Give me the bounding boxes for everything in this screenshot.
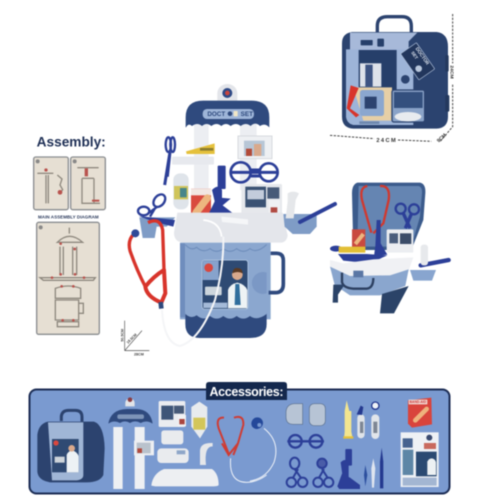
case poster: doctor (202, 260, 248, 309)
counter top (174, 213, 288, 243)
monitor (159, 401, 186, 427)
sticker: doctor set: SET (410, 50, 419, 60)
thermometer (357, 406, 365, 438)
monitor (387, 229, 413, 253)
open case with accessories (330, 183, 449, 313)
dimension axes: 28CM (134, 352, 144, 356)
counter (330, 257, 413, 278)
case handle (377, 17, 411, 33)
microscope (184, 166, 237, 227)
sticker: doctor set: DOCTOR (415, 46, 430, 66)
case base (330, 267, 409, 295)
tube (250, 428, 276, 481)
stethoscope (218, 417, 243, 455)
microscope (337, 449, 360, 489)
sticker: doctor set (401, 43, 435, 80)
dimension axes: 18.5CM (126, 333, 138, 345)
accessories items right (250, 398, 439, 489)
chest piece (252, 417, 263, 429)
frame (134, 441, 154, 455)
scissors (287, 458, 333, 487)
roof piece (108, 409, 153, 424)
band-aid box (408, 398, 432, 428)
packaged case with dimensions (330, 14, 455, 144)
open lid (352, 183, 425, 250)
band-aid box: BAND-AID (410, 400, 427, 404)
panel: accessories (30, 382, 450, 494)
panel: assembly (34, 135, 106, 334)
closed case (342, 32, 449, 129)
instruction sheet (401, 432, 439, 487)
monitor (241, 184, 282, 216)
label: depth 9CM: 9CM (436, 133, 448, 144)
top badge (217, 84, 237, 101)
icon: scissors upright (165, 137, 175, 185)
legs (333, 285, 409, 313)
scissors (396, 204, 419, 228)
dimension lines (330, 14, 453, 142)
accessories items left (37, 397, 267, 489)
chest piece (251, 418, 262, 429)
dimension axes (120, 321, 149, 356)
text: main assembly diagram: MAIN ASSEMBLY DIAGRAM (38, 215, 99, 220)
dimension axes: 50.5CM (120, 329, 124, 342)
syringe (343, 400, 353, 439)
right tray (410, 245, 449, 281)
tube (230, 458, 267, 482)
band-aid box (191, 189, 211, 215)
tools (364, 448, 383, 488)
heading: assembly: Assembly: (37, 135, 106, 150)
shelf with syringe (172, 143, 215, 165)
bottle (191, 402, 207, 438)
label: height 24CM: 24CM (449, 65, 455, 79)
red stethoscope (361, 186, 389, 233)
closed case (37, 410, 105, 482)
stethoscope tube (162, 237, 223, 346)
roof with sign (186, 101, 269, 127)
faucet (200, 443, 213, 465)
top badge (125, 397, 135, 406)
screen frame (238, 136, 272, 159)
otoscope (371, 402, 379, 439)
icon: red stethoscope (129, 221, 165, 309)
left tray (138, 192, 175, 238)
roof with sign: DOCT (207, 111, 225, 118)
band-aid box (352, 229, 365, 249)
white tray pieces (157, 430, 189, 463)
columns (113, 427, 145, 489)
assembly step 1 (34, 157, 68, 210)
bottle (173, 173, 189, 209)
accessories label: Accessories: (210, 385, 284, 399)
glasses (287, 435, 324, 448)
grey covers (286, 404, 325, 426)
columns (194, 123, 257, 200)
syringe yellow (339, 247, 365, 253)
blue tools pile (330, 220, 387, 263)
lid inner (357, 186, 422, 247)
label: width 24CM: 24CM (376, 138, 396, 144)
roof with sign: SET (241, 111, 253, 118)
case body (180, 243, 283, 338)
assembly step 3 (37, 222, 99, 334)
panel background (30, 390, 450, 494)
counter piece (151, 469, 219, 486)
icon: glasses (231, 162, 278, 182)
right tray with tool (283, 192, 335, 234)
assembly step 2 (71, 157, 105, 210)
main product: toy standing open (120, 84, 335, 356)
